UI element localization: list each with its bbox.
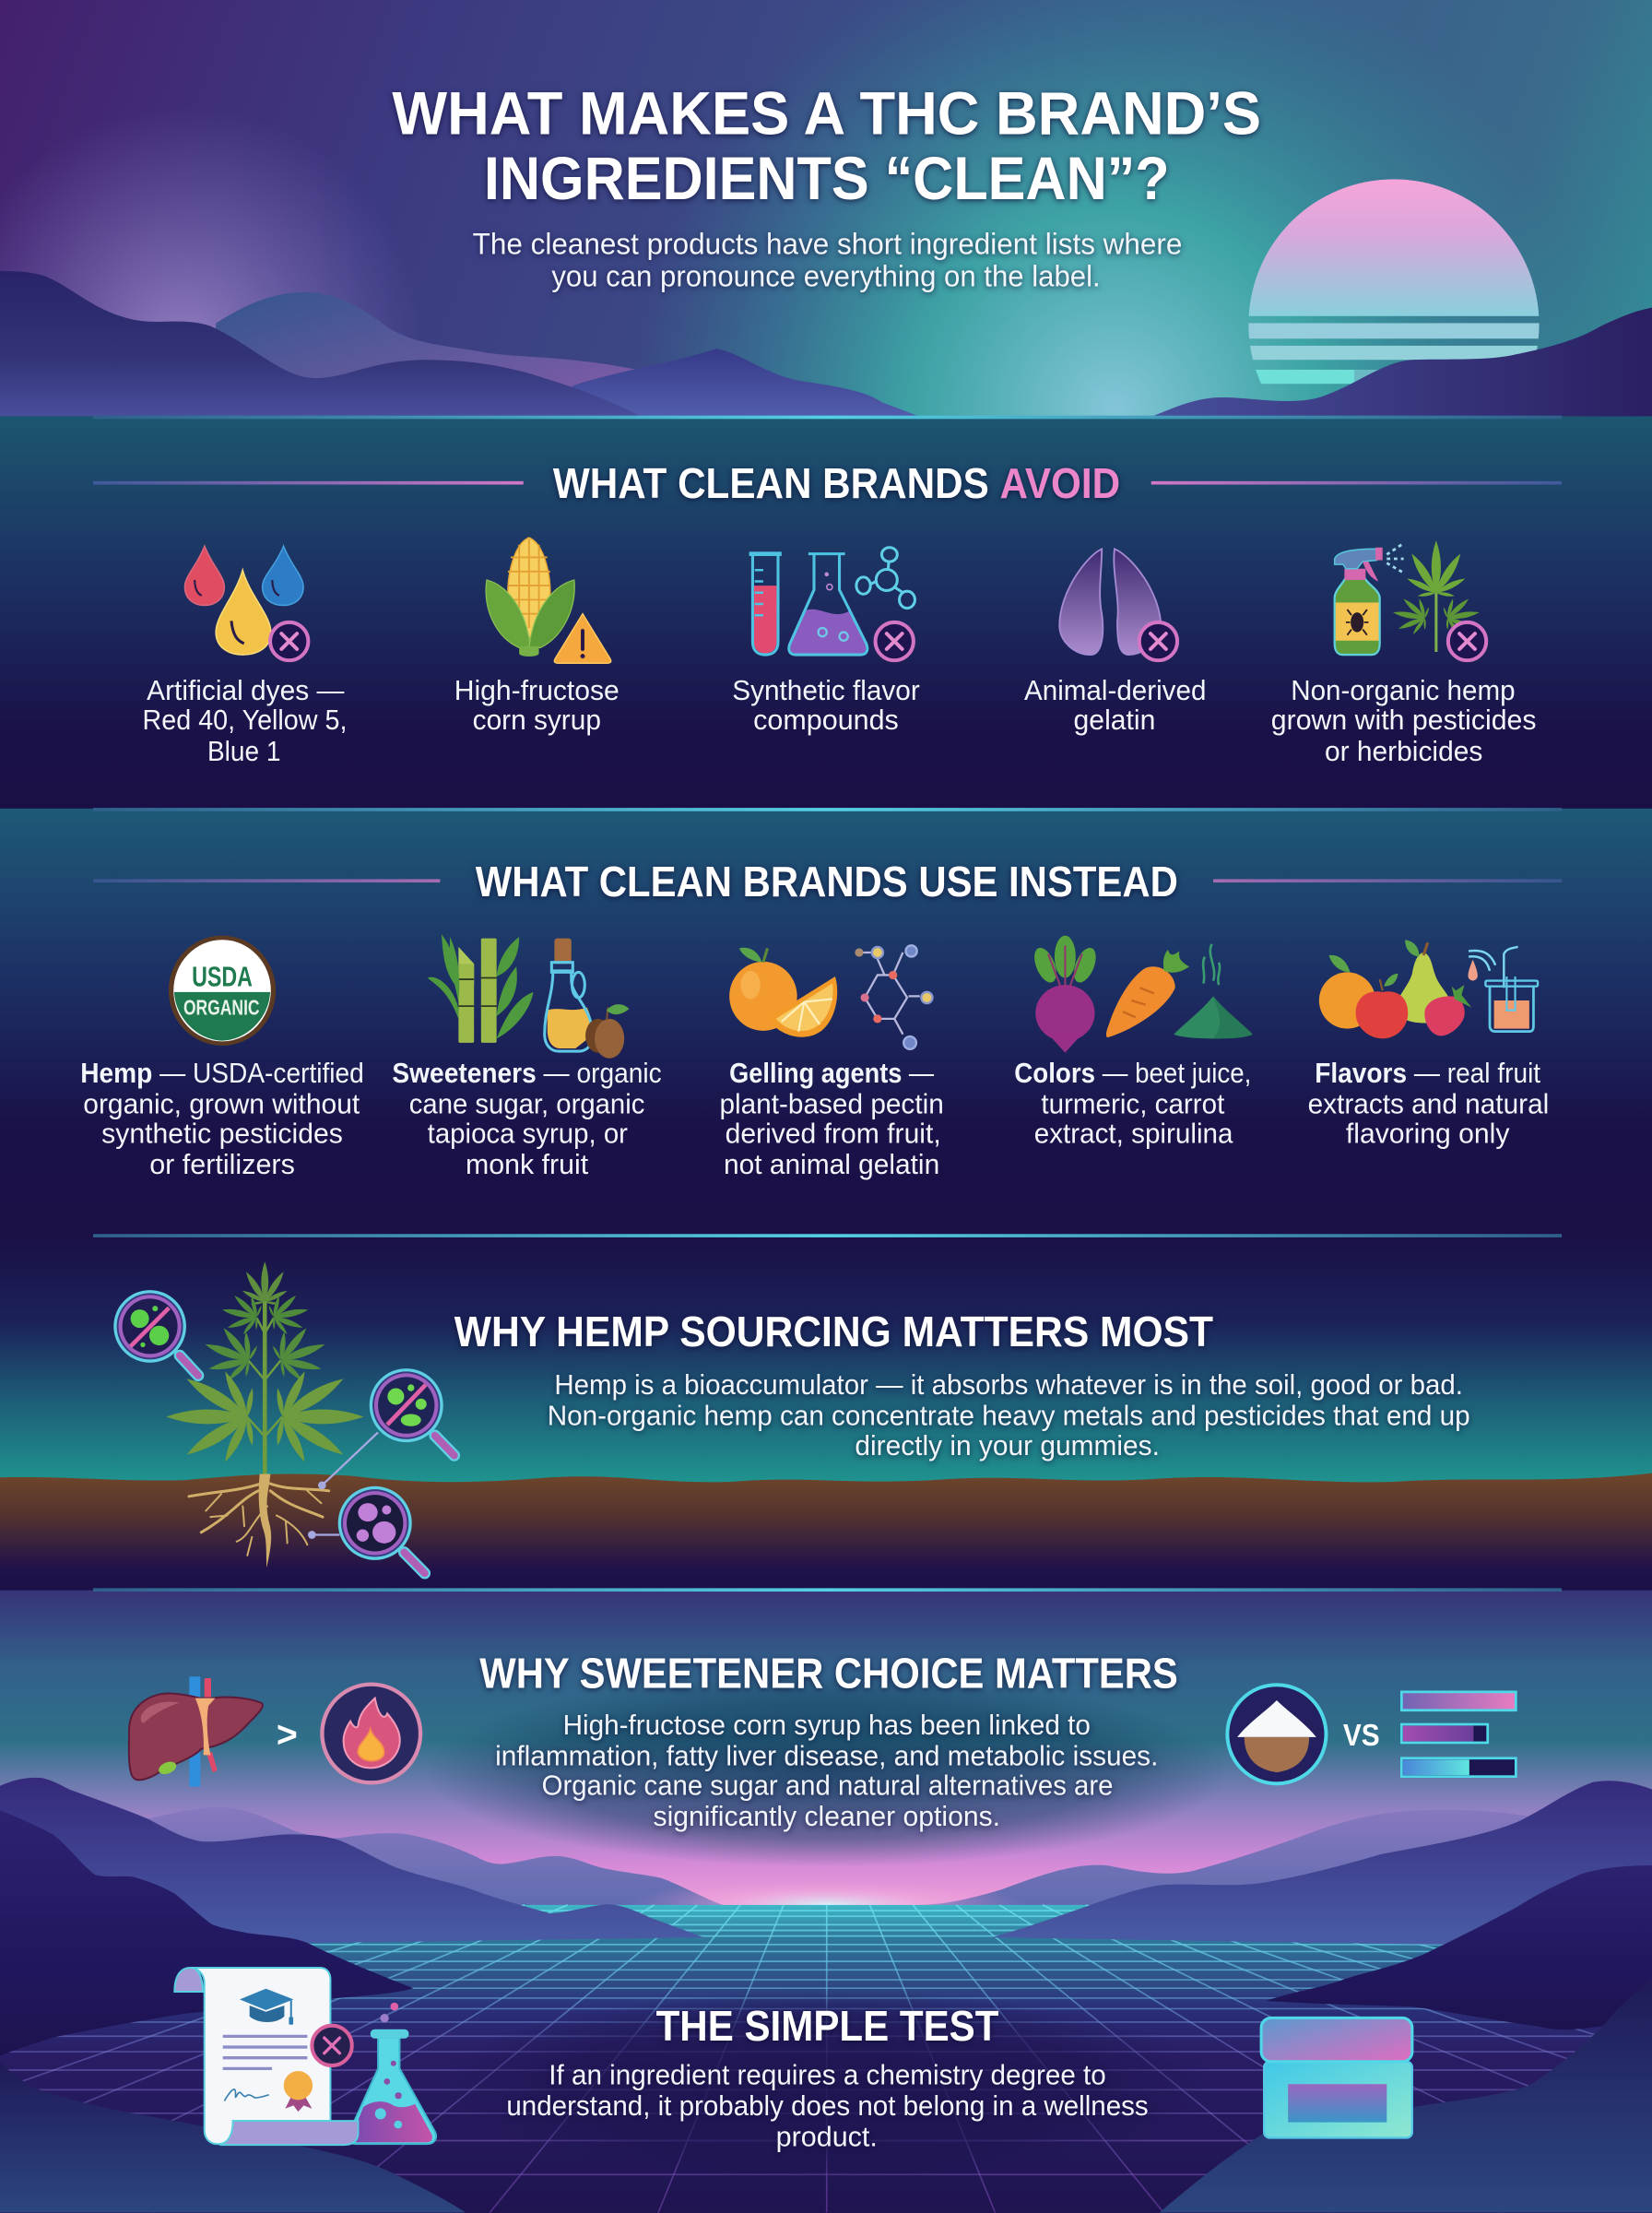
text: colors: extract, spirulina bbox=[1034, 1118, 1233, 1150]
icon: USDA organic seal: USDA bbox=[192, 962, 253, 993]
text: artificial dyes bbox=[143, 675, 347, 767]
text: gelling agents bbox=[719, 1058, 944, 1180]
text: sweeteners: cane sugar, organic bbox=[409, 1088, 644, 1119]
icon: corn with warning bbox=[486, 538, 611, 663]
title: WHAT MAKES A THC BRAND’S bbox=[392, 78, 1261, 147]
text: hemp: synthetic pesticides bbox=[101, 1118, 343, 1150]
text: artificial dyes: Artificial dyes — bbox=[147, 675, 345, 706]
text: animal-derived: Animal-derived bbox=[1024, 675, 1206, 706]
text: sweetener body: significantly cleaner options. bbox=[654, 1801, 1000, 1832]
heading: avoid: WHAT CLEAN BRANDS AVOID bbox=[553, 459, 1120, 507]
panel: hero header bbox=[0, 0, 1652, 418]
text: non-organic hemp: Non-organic hemp bbox=[1291, 675, 1516, 706]
mountains: front dark left bbox=[0, 1810, 413, 2056]
text: hemp body bbox=[548, 1369, 1470, 1462]
panel: why hemp sourcing matters most bbox=[0, 1234, 1652, 1592]
icon: orange and pectin molecule bbox=[729, 945, 933, 1049]
text: high-fructose: corn syrup bbox=[473, 704, 601, 736]
text: gelling agents: plant-based pectin bbox=[719, 1088, 944, 1119]
text: flavors: flavoring only bbox=[1346, 1118, 1510, 1150]
icon: flame in circle bbox=[322, 1685, 420, 1782]
text: sweetener body: High-fructose corn syrup has been linked to bbox=[563, 1710, 1091, 1741]
text: non-organic hemp: grown with pesticides bbox=[1271, 704, 1537, 736]
icon: artificial dye drops bbox=[184, 546, 308, 660]
icon: liver bbox=[129, 1676, 263, 1787]
soil band bbox=[0, 1473, 1652, 1592]
mountains: hero ridgelines bbox=[0, 271, 1652, 418]
text: hemp body: Non-organic hemp can concentrate heavy metals and pesticides that end up bbox=[548, 1401, 1470, 1432]
horizon glow bbox=[630, 1876, 1024, 1934]
mountains: front dark right bbox=[1266, 1865, 1652, 2030]
callout: magnifier upper left bbox=[113, 1290, 198, 1376]
text: hemp: Hemp — USDA-certified bbox=[80, 1058, 364, 1089]
text: flavors bbox=[1308, 1058, 1549, 1150]
text: colors: Colors — beet juice, bbox=[1014, 1058, 1251, 1089]
title: INGREDIENTS “CLEAN”? bbox=[484, 144, 1170, 212]
mountains: mid range bbox=[0, 1778, 1652, 1947]
text: sweeteners bbox=[392, 1058, 662, 1180]
text: sweeteners: Sweeteners — organic bbox=[392, 1058, 662, 1089]
text: gelling agents: Gelling agents — bbox=[729, 1058, 934, 1089]
panel: why sweetener choice matters and simple test bbox=[0, 1588, 1652, 2213]
icon: warning triangle bbox=[554, 614, 611, 663]
panel: what clean brands use instead bbox=[0, 808, 1652, 1237]
chart: comparison bars bbox=[1401, 1692, 1516, 1777]
icon: laboratory flask bbox=[348, 2003, 436, 2144]
text halo: sweetener copy bbox=[425, 1675, 1229, 1867]
roots bbox=[189, 1473, 329, 1568]
icon: USDA organic seal bbox=[169, 936, 276, 1046]
text: sweeteners: monk fruit bbox=[466, 1149, 589, 1180]
icon: sugarcane and syrup bottle bbox=[428, 934, 630, 1059]
icon: bowl of cane sugar bbox=[1227, 1685, 1326, 1783]
subtitle: The cleanest products have short ingredient lists where bbox=[473, 227, 1182, 260]
mountains: back range bbox=[0, 1807, 1652, 1975]
mountains: front blue right bbox=[1160, 1979, 1652, 2213]
text: colors: turmeric, carrot bbox=[1041, 1088, 1225, 1119]
text: simple test body bbox=[506, 2059, 1149, 2153]
arrow: greater than: > bbox=[277, 1715, 298, 1756]
icon: jar bbox=[1261, 2018, 1412, 2137]
text: high-fructose bbox=[454, 675, 620, 736]
icon: beet carrot spirulina bbox=[1030, 936, 1253, 1053]
icon: pesticide spray and hemp bbox=[1335, 540, 1486, 660]
text: synthetic flavor: Synthetic flavor bbox=[732, 675, 920, 706]
icon: diploma scroll bbox=[174, 1968, 358, 2145]
text: colors bbox=[1014, 1058, 1251, 1150]
text: sweeteners: tapioca syrup, or bbox=[428, 1118, 628, 1150]
text: artificial dyes: Red 40, Yellow 5, bbox=[143, 704, 347, 736]
text halo: simple test copy bbox=[439, 1990, 1215, 2182]
subtitle: you can pronounce everything on the label. bbox=[551, 260, 1101, 293]
title bbox=[392, 78, 1261, 212]
icon: test tube flask molecule bbox=[749, 548, 914, 660]
text: gelling agents: not animal gelatin bbox=[724, 1149, 939, 1180]
icon: hemp plant bbox=[1389, 540, 1482, 652]
callout: magnifier right bbox=[318, 1368, 454, 1489]
text: simple test body: understand, it probably does not belong in a wellness bbox=[506, 2090, 1149, 2122]
text: hemp bbox=[80, 1058, 364, 1180]
heading: sweetener choice: WHY SWEETENER CHOICE MATTERS bbox=[479, 1649, 1178, 1697]
text: artificial dyes: Blue 1 bbox=[207, 736, 281, 767]
icon: reject badge bbox=[312, 2026, 352, 2065]
text: animal-derived: gelatin bbox=[1074, 704, 1155, 736]
icon: gelatin hooves bbox=[1059, 549, 1177, 660]
text: simple test body: product. bbox=[776, 2122, 878, 2153]
text: animal-derived bbox=[1024, 675, 1206, 736]
heading: hemp sourcing: WHY HEMP SOURCING MATTERS MOST bbox=[454, 1308, 1213, 1355]
text: hemp body: Hemp is a bioaccumulator — it absorbs whatever is in the soil, good or bad. bbox=[554, 1369, 1463, 1401]
icon: molecule bbox=[856, 548, 914, 609]
text: sweetener body bbox=[495, 1710, 1158, 1832]
subtitle bbox=[473, 227, 1182, 293]
icon: striped sun bbox=[1242, 170, 1546, 384]
text: synthetic flavor: compounds bbox=[753, 704, 899, 736]
heading: the simple test: THE SIMPLE TEST bbox=[656, 2002, 998, 2050]
floor with perspective grid bbox=[0, 1905, 1652, 2213]
heading: use instead: WHAT CLEAN BRANDS USE INSTEAD bbox=[476, 858, 1178, 905]
text: sweetener body: inflammation, fatty liver disease, and metabolic issues. bbox=[495, 1740, 1158, 1771]
icon: hemp plant with roots bbox=[166, 1261, 364, 1568]
text: sweetener body: Organic cane sugar and natural alternatives are bbox=[542, 1770, 1113, 1802]
text: high-fructose: High-fructose bbox=[454, 675, 620, 706]
text: hemp: or fertilizers bbox=[149, 1149, 295, 1180]
icon: molecule bbox=[855, 945, 933, 1049]
panel: what clean brands avoid bbox=[0, 416, 1652, 810]
callout: magnifier lower bbox=[308, 1486, 425, 1573]
text: simple test body: If an ingredient requires a chemistry degree to bbox=[549, 2059, 1106, 2090]
icon: fruits and extract beaker bbox=[1319, 940, 1538, 1038]
text: non-organic hemp bbox=[1271, 675, 1537, 767]
mountains: front blue left bbox=[0, 2063, 466, 2213]
text: synthetic flavor bbox=[732, 675, 920, 736]
text: hemp: organic, grown without bbox=[83, 1088, 360, 1119]
icon: USDA organic seal: ORGANIC bbox=[183, 995, 260, 1019]
text: vs: VS bbox=[1343, 1719, 1380, 1753]
text: hemp body: directly in your gummies. bbox=[855, 1430, 1160, 1462]
text: flavors: extracts and natural bbox=[1308, 1088, 1549, 1119]
text: flavors: Flavors — real fruit bbox=[1315, 1058, 1541, 1089]
text: gelling agents: derived from fruit, bbox=[726, 1118, 941, 1150]
text: non-organic hemp: or herbicides bbox=[1325, 736, 1482, 767]
